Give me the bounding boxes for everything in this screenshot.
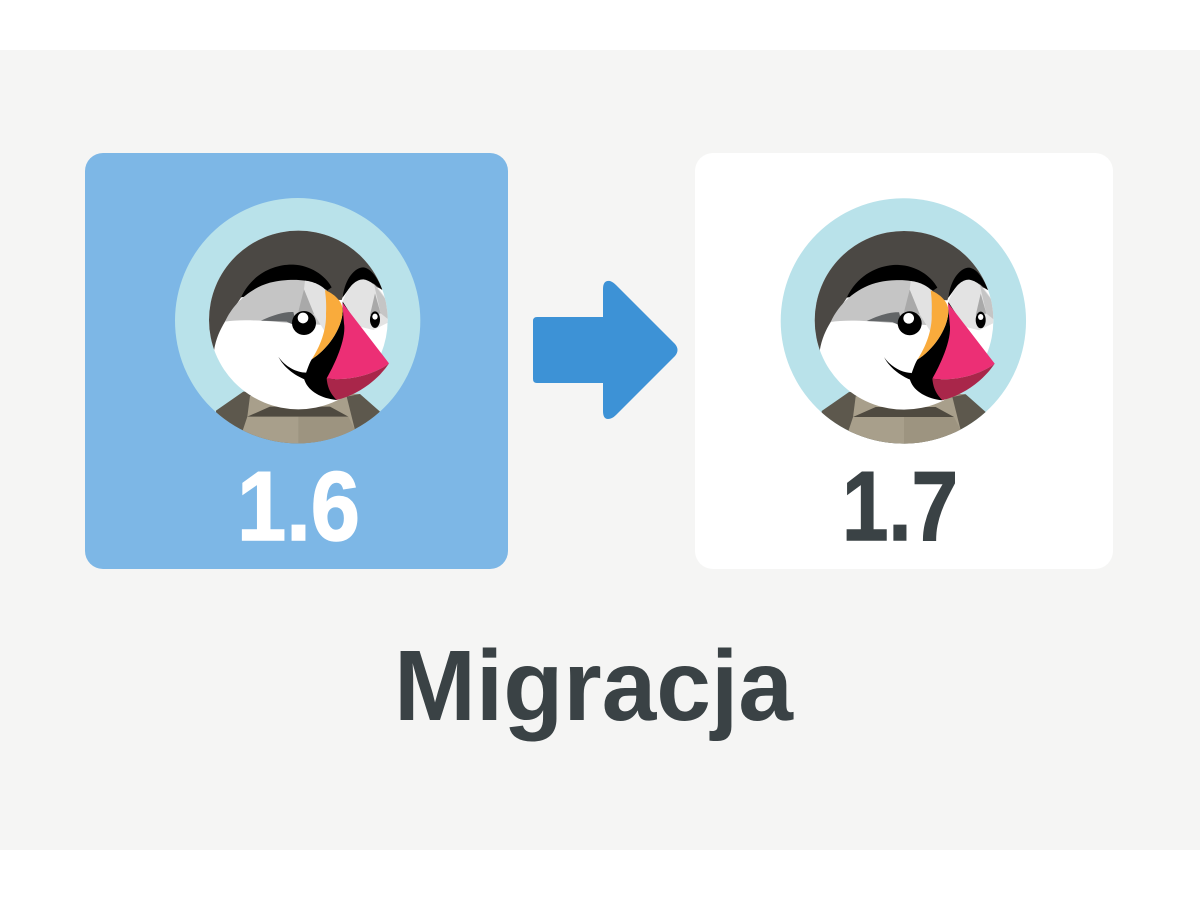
arrow: migration direction xyxy=(533,281,678,419)
icon: puffin logo 1.6 xyxy=(175,198,420,457)
version label 1.6: 1.6 xyxy=(237,451,360,561)
panel: version 1.6 xyxy=(85,153,508,569)
version label 1.7: 1.7 xyxy=(842,451,958,561)
icon: puffin logo 1.7 xyxy=(781,198,1026,457)
panel: version 1.7 xyxy=(695,153,1113,569)
title: Migracja xyxy=(394,630,794,742)
